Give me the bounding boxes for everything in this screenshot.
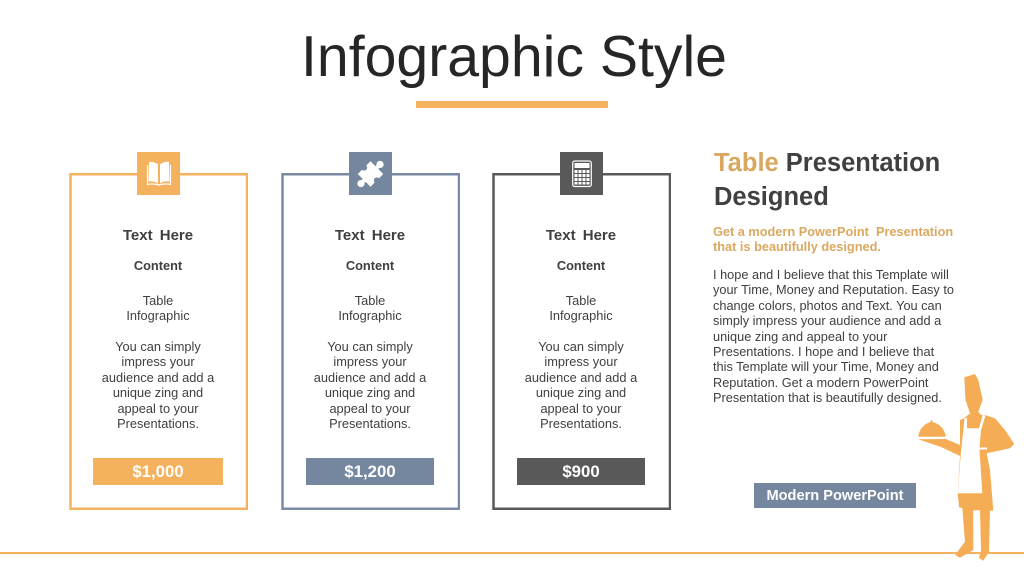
text block: impress your [333,354,407,369]
right subheading: that is beautifully designed. [713,239,881,254]
text block: Table [355,292,385,308]
text block: appeal to your [540,401,622,416]
title: Infographic Style [301,25,727,89]
title underline [416,101,608,108]
text block: appeal to your [117,401,199,416]
text block: unique zing and [536,385,626,400]
text block: audience and add a [525,370,637,385]
right body text: this Template will your Time, Money and [713,359,939,374]
right body text: Presentation that is beautifully designed. [713,390,942,405]
right body text: simply impress your audience and add a [713,313,941,328]
right body text: your Time, Money and Reputation. Easy to [713,282,954,297]
right subheading: Get a modern PowerPoint Presentation [713,224,953,238]
text block: Infographic [549,308,613,323]
right body text: Reputation. Get a modern PowerPoint [713,375,928,390]
right body text: I hope and I believe that this Template will [713,267,949,282]
subheading: Content [557,258,605,272]
right heading [714,149,940,211]
price [306,458,434,485]
heading: Text Here [546,227,616,244]
right body text: unique zing and appeal to your [713,329,887,344]
text block: You can simply [327,339,413,354]
text block [314,339,426,431]
text block [102,339,214,431]
text block: Presentations. [540,416,622,431]
text block: Table [143,292,173,308]
text block: Infographic [338,308,402,323]
icon: chef illustration [918,374,1014,561]
price [93,458,223,485]
price [517,458,645,485]
right heading: Table Presentation [714,149,940,177]
button label: Modern PowerPoint [766,488,904,504]
text block: unique zing and [113,385,203,400]
icon: book [137,152,180,195]
icon: calculator [560,152,603,195]
text block: audience and add a [102,370,214,385]
subheading: Content [346,258,394,272]
text block [525,339,638,431]
button label [754,483,916,508]
heading: Text Here [335,227,405,244]
floor line [0,552,1024,554]
right body text: Presentations. I hope and I believe that [713,344,934,359]
text block [549,292,613,323]
text block: impress your [121,354,195,369]
text block: You can simply [538,339,624,354]
right subheading [713,224,953,254]
text block: Presentations. [329,416,411,431]
text block [126,292,190,323]
text block: unique zing and [325,385,415,400]
icon: puzzle [349,152,392,195]
text block: Infographic [126,308,190,323]
text block: Table [566,292,596,308]
text block: audience and add a [314,370,426,385]
subheading: Content [134,258,182,272]
text block: appeal to your [329,401,411,416]
text block: impress your [544,354,618,369]
heading: Text Here [123,227,193,244]
text block: You can simply [115,339,201,354]
right heading: Designed [714,183,829,211]
price: $1,200 [344,462,396,481]
right body text: change colors, photos and Text. You can [713,298,942,313]
text block: Presentations. [117,416,199,431]
price: $900 [562,462,600,481]
price: $1,000 [132,462,184,481]
text block [338,292,402,323]
right body text [713,267,954,405]
